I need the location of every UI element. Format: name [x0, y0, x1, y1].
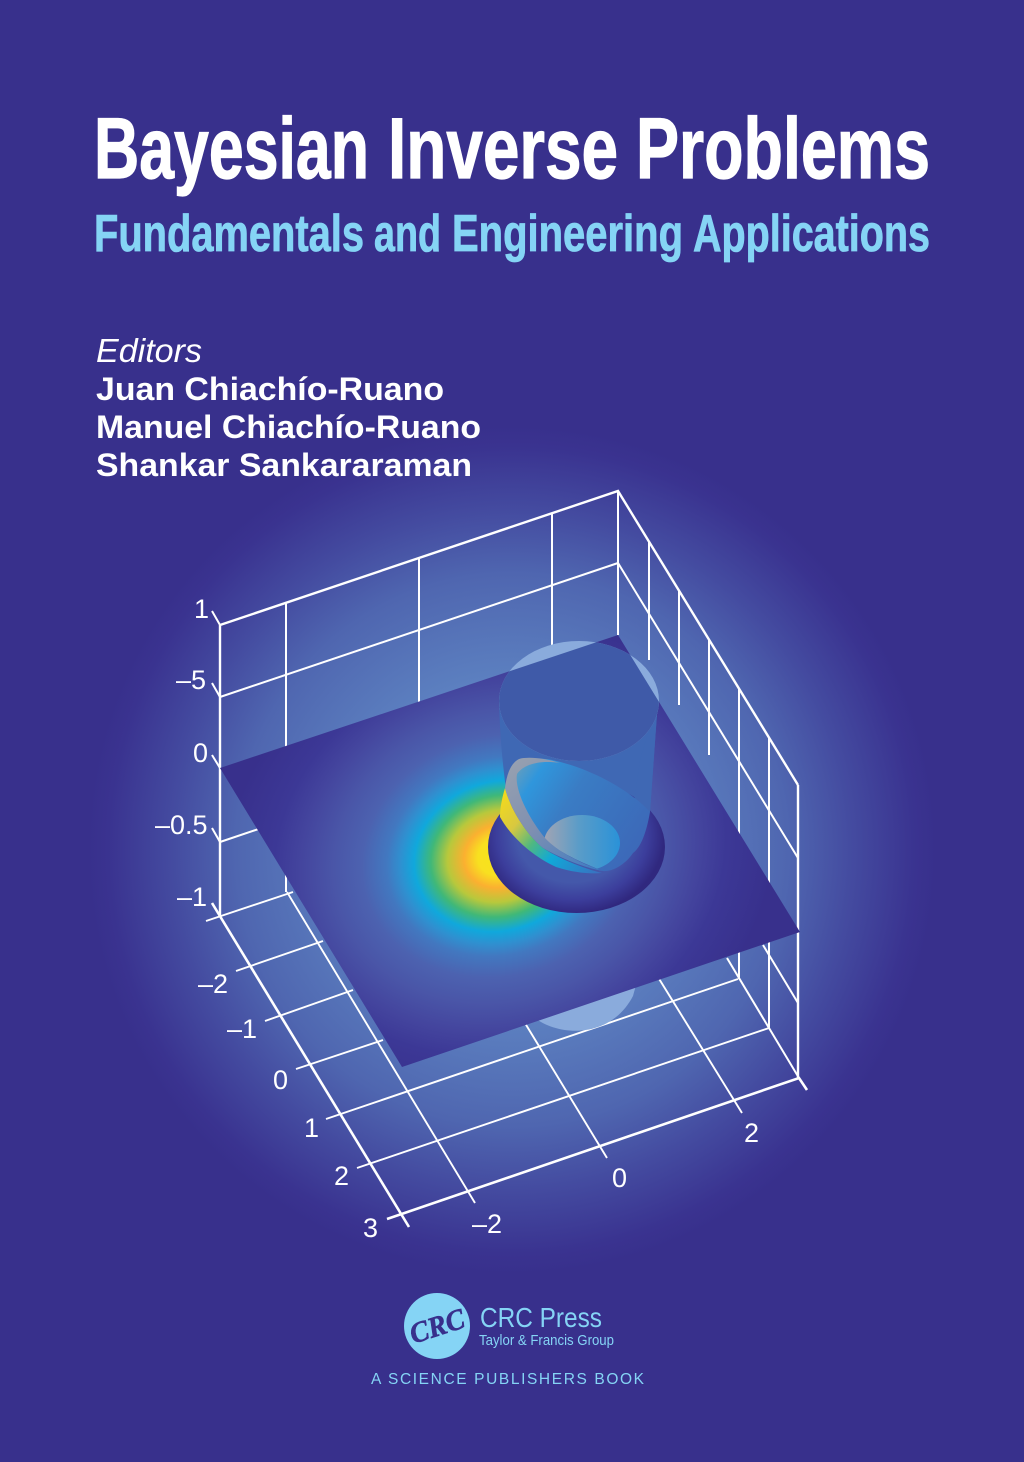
title: Problems [636, 101, 930, 197]
subtitle [94, 205, 930, 263]
publisher name: CRC Press [480, 1302, 602, 1333]
raised ring [488, 781, 665, 913]
axis labels: –2 [472, 1209, 502, 1239]
cylinder top dark part [499, 641, 659, 761]
axis labels: –1 [177, 882, 207, 912]
axis labels: –0.5 [155, 810, 208, 840]
imprint line: A SCIENCE PUBLISHERS BOOK [371, 1371, 645, 1388]
editors: Editors [96, 332, 202, 369]
axis labels: 0 [273, 1065, 288, 1095]
axis labels: –5 [176, 665, 206, 695]
gray crescent [505, 758, 603, 871]
axis labels: –2 [198, 969, 228, 999]
axis labels: –1 [227, 1014, 257, 1044]
title: Inverse [388, 101, 618, 197]
axis labels: 2 [334, 1161, 349, 1191]
wall and floor grid [206, 491, 807, 1227]
publisher group: Taylor & Francis Group [479, 1333, 614, 1349]
cylinder top light [499, 641, 659, 761]
logo letters: CRC [406, 1303, 469, 1351]
editors: Manuel Chiachío-Ruano [96, 409, 481, 445]
editors: Shankar Sankararaman [96, 447, 472, 483]
editors: Juan Chiachío-Ruano [96, 371, 444, 407]
axis labels: 1 [304, 1113, 319, 1143]
surface plate [220, 635, 800, 1067]
subtitle: Engineering [452, 205, 683, 263]
subtitle: and [374, 205, 441, 263]
axis labels: 2 [744, 1118, 759, 1148]
background glow [87, 425, 937, 1275]
inner surface [513, 759, 650, 871]
rainbow band [500, 788, 602, 873]
ring right wall [630, 700, 658, 830]
title [94, 101, 930, 197]
title: Bayesian [94, 101, 369, 197]
subtitle: Fundamentals [94, 205, 364, 263]
3D plot [206, 491, 807, 1227]
subtitle: Applications [693, 205, 930, 263]
editors [96, 332, 481, 483]
axis labels: 0 [193, 738, 208, 768]
axis labels [155, 594, 759, 1243]
logo circle [404, 1293, 470, 1359]
inner disc [544, 815, 620, 871]
axis labels: 3 [363, 1213, 378, 1243]
cylinder base below plate [535, 985, 636, 1031]
cylinder walls [499, 700, 658, 830]
axis labels: 0 [612, 1163, 627, 1193]
publisher logo [371, 1293, 645, 1388]
axis labels: 1 [194, 594, 209, 624]
